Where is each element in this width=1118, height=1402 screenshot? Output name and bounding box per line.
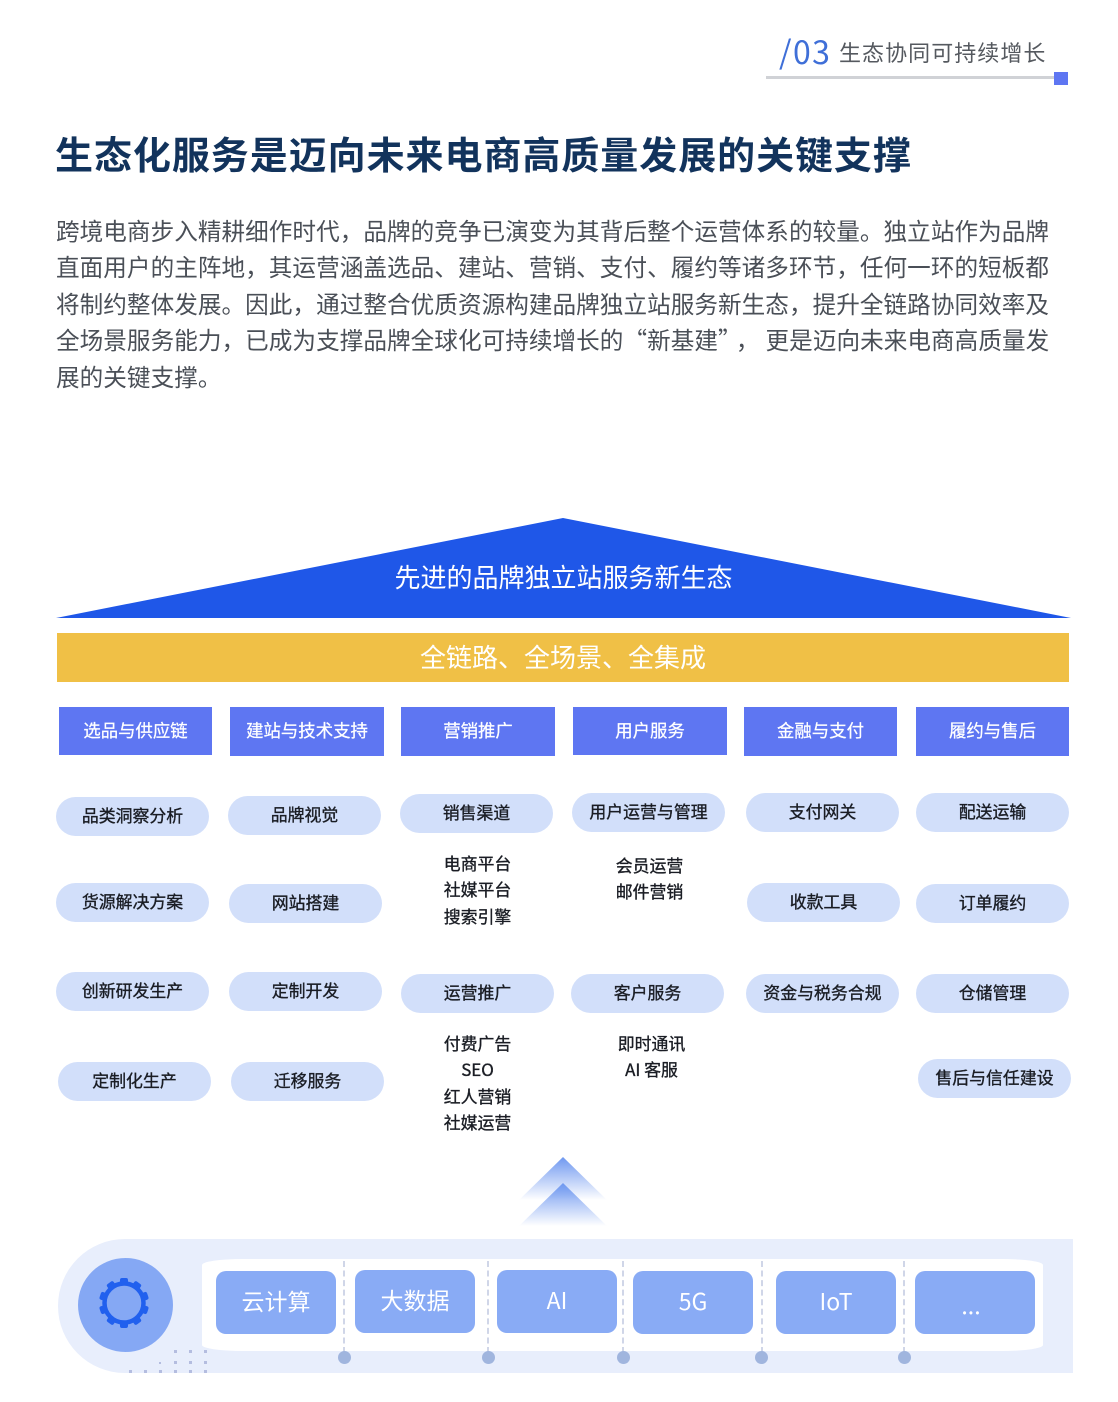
sublist: 搜索引擎: [444, 903, 511, 928]
tile: cloud computing: 云计算: [242, 1283, 310, 1317]
pill: [229, 884, 382, 923]
pill: 订单履约: [959, 894, 1026, 913]
intro paragraph: 跨境电商步入精耕细作时代，品牌的竞争已演变为其背后整个运营体系的较量。独立站作为品牌: [56, 213, 1049, 247]
pill: [228, 796, 381, 835]
sublist: 电商平台: [444, 850, 511, 875]
sublist: 社媒平台: [444, 876, 511, 901]
pill: [918, 1059, 1071, 1098]
pill: [746, 793, 899, 832]
sublist: 社媒运营: [444, 1109, 511, 1134]
column header: [59, 707, 212, 755]
pill: 创新研发生产: [82, 982, 183, 1001]
pill: [231, 1062, 384, 1101]
pill: 资金与税务合规: [763, 984, 882, 1003]
double up arrow: [522, 1157, 604, 1224]
section title: 生态协同可持续增长: [839, 41, 1046, 66]
section number: /03: [779, 28, 831, 74]
pill: 货源解决方案: [82, 893, 183, 912]
pill: [56, 972, 209, 1011]
pill: [916, 974, 1069, 1013]
pill: 定制开发: [272, 982, 339, 1001]
column header: [916, 707, 1069, 756]
column 1: 选品与供应链: [56, 707, 212, 1101]
sublist: [444, 850, 511, 928]
column header: 用户服务: [615, 721, 685, 741]
sublist: [616, 852, 683, 903]
pill: 售后与信任建设: [935, 1069, 1054, 1088]
tile: 5G: [633, 1271, 753, 1334]
tile: 5G: 5G: [679, 1283, 707, 1317]
column 5: 金融与支付: [744, 707, 900, 1013]
column header: 选品与供应链: [83, 721, 188, 741]
tile: more: ...: [961, 1287, 981, 1321]
dot pattern: [129, 1350, 207, 1373]
pill: 品类洞察分析: [82, 807, 183, 826]
roof title: 先进的品牌独立站服务新生态: [394, 563, 732, 593]
sublist: 邮件营销: [616, 878, 683, 903]
pill: [229, 972, 382, 1011]
column header: 建站与技术支持: [246, 721, 368, 741]
sublist: 付费广告: [444, 1030, 511, 1055]
sublist: [618, 1030, 685, 1081]
icon: gear in circle: [78, 1258, 173, 1352]
pill: [401, 974, 554, 1013]
pill: [916, 884, 1069, 923]
column 6: 履约与售后: [916, 707, 1071, 1098]
column header: 金融与支付: [777, 721, 864, 741]
sublist: SEO: [461, 1056, 494, 1081]
pill: [746, 974, 899, 1013]
sublist: [444, 1030, 511, 1134]
column 3: 营销推广: [400, 707, 555, 1134]
pill: [747, 883, 900, 922]
pill: 网站搭建: [272, 894, 339, 913]
pill: 定制化生产: [92, 1072, 177, 1091]
pill: 支付网关: [789, 803, 856, 822]
pill: 迁移服务: [274, 1072, 341, 1091]
column header: [573, 707, 727, 755]
intro paragraph: 展的关键支撑。: [56, 359, 222, 393]
pill: [400, 794, 553, 833]
pill: 用户运营与管理: [589, 803, 708, 822]
column header: 营销推广: [443, 721, 513, 741]
intro paragraph: [56, 213, 1049, 393]
pill: 仓储管理: [959, 984, 1026, 1003]
column header: [401, 707, 555, 756]
tile: AI: AI: [547, 1282, 567, 1316]
section header: [766, 28, 1068, 85]
pill: 客户服务: [614, 984, 681, 1003]
sublist: AI 客服: [625, 1056, 678, 1081]
tile: AI: [497, 1270, 617, 1333]
pill: [916, 793, 1069, 832]
tile: IoT: IoT: [820, 1283, 852, 1317]
tile: cloud computing: [216, 1271, 336, 1334]
intro paragraph: 将制约整体发展。因此，通过整合优质资源构建品牌独立站服务新生态，提升全链路协同效率及: [56, 286, 1049, 320]
column header: 履约与售后: [949, 721, 1036, 741]
pill: 收款工具: [790, 893, 857, 912]
pill: 品牌视觉: [271, 806, 338, 825]
pill: [56, 797, 209, 836]
pill: [56, 883, 209, 922]
intro paragraph: 全场景服务能力，已成为支撑品牌全球化可持续增长的“新基建” ， 更是迈向未来电商高质量发: [56, 322, 1049, 356]
yellow banner: [57, 633, 1069, 682]
tile: more: [915, 1271, 1035, 1334]
intro paragraph: 直面用户的主阵地，其运营涵盖选品、建站、营销、支付、履约等诸多环节，任何一环的短板都: [56, 249, 1049, 283]
technology foundation panel: [58, 1239, 1073, 1373]
main heading: 生态化服务是迈向未来电商高质量发展的关键支撑: [55, 136, 912, 178]
header square marker: [1054, 72, 1068, 85]
pill: [572, 793, 725, 832]
pill: 运营推广: [444, 984, 511, 1003]
column header: [230, 707, 384, 756]
white tile tray: [202, 1259, 1043, 1351]
yellow banner: 全链路、全场景、全集成: [420, 643, 706, 673]
tile: IoT: [776, 1271, 896, 1334]
header rule: [766, 76, 1056, 79]
roof triangle banner: [56, 518, 1071, 618]
pill: 销售渠道: [443, 804, 510, 823]
column 2: 建站与技术支持: [228, 707, 384, 1101]
column header: [744, 707, 897, 756]
sublist: 即时通讯: [618, 1030, 685, 1055]
column 4: 用户服务: [571, 707, 727, 1081]
sublist: 会员运营: [616, 852, 683, 877]
tile: big data: 大数据: [380, 1282, 450, 1316]
pill: [571, 974, 724, 1013]
pill: 配送运输: [959, 803, 1026, 822]
pill: [58, 1062, 211, 1101]
sublist: 红人营销: [444, 1083, 511, 1108]
tile: big data: [355, 1270, 475, 1333]
